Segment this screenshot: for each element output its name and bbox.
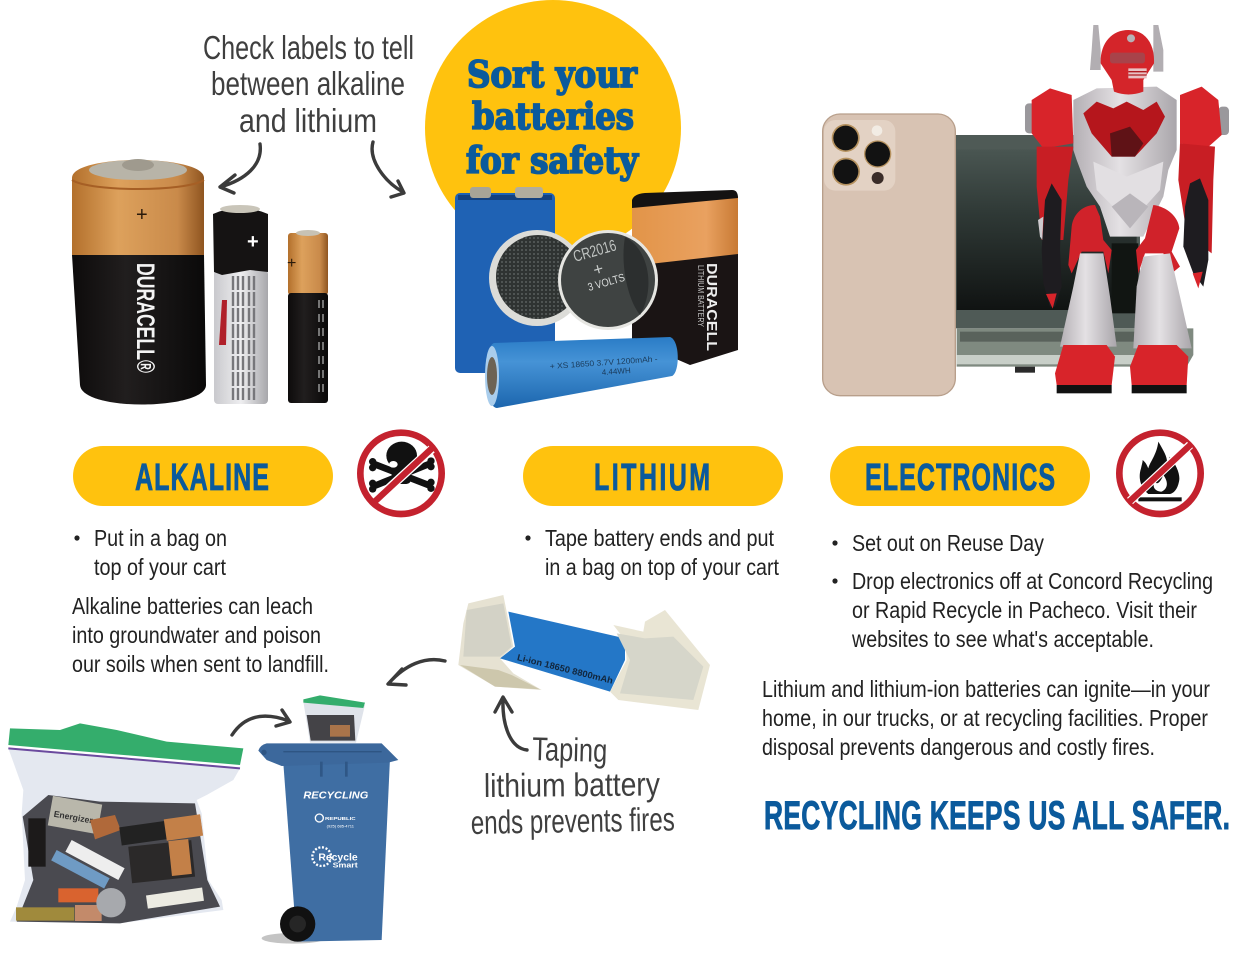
lantern battery: LITHIUM BATTERY — [696, 265, 705, 328]
title: Sort your — [467, 54, 638, 96]
lithium fire warning text — [762, 676, 1210, 760]
recycling bin with bag photo: (925) 685-4711 — [327, 825, 354, 829]
coin cell CR2016 — [558, 230, 658, 330]
taped lithium battery photo — [458, 595, 710, 710]
zip bag of batteries photo — [8, 723, 243, 923]
alkaline batteries photo — [72, 159, 328, 405]
AA battery: + — [247, 231, 259, 253]
electronics instructions — [832, 530, 1213, 652]
18650 cylindrical cell: + XS 18650 3.7V 1200mAh - — [550, 354, 658, 371]
coin cell CR2016: CR2016 — [571, 237, 618, 266]
handwritten note: taping: Taping — [532, 730, 608, 769]
18650 cylindrical cell: 4.44WH — [602, 366, 631, 377]
handwritten note: check labels: and lithium — [239, 102, 377, 139]
label pill: alkaline — [73, 446, 333, 506]
AA battery — [213, 205, 268, 404]
title: batteries — [472, 96, 634, 138]
coin cell CR2016: + — [591, 259, 606, 280]
handwritten note: check labels: Check labels to tell — [203, 29, 414, 66]
alkaline warning text: our soils when sent to landfill. — [72, 651, 329, 677]
alkaline instructions: Put in a bag on — [94, 525, 227, 551]
coin cell CR2016: 3 VOLTS — [587, 272, 626, 294]
9V battery — [455, 187, 555, 373]
smartphone — [823, 114, 955, 396]
zip bag of batteries photo: Energizer — [53, 809, 94, 826]
label pill: electronics — [830, 446, 1090, 506]
lantern battery: DURACELL — [703, 263, 720, 351]
alkaline instructions: top of your cart — [94, 554, 227, 580]
electronics photo — [823, 25, 1229, 396]
closing slogan: RECYCLING KEEPS US ALL SAFER. — [764, 794, 1230, 838]
label pill: alkaline: ALKALINE — [135, 456, 269, 498]
recycling bin with bag photo: Smart — [333, 861, 358, 870]
title — [466, 54, 639, 182]
alkaline warning text: Alkaline batteries can leach — [72, 593, 313, 619]
label pill: lithium: LITHIUM — [594, 456, 710, 498]
no toxic icon — [360, 433, 442, 514]
arrow: to lithium batteries — [372, 142, 404, 197]
arrow: bag to bin — [232, 710, 290, 735]
label pill: lithium — [523, 446, 783, 506]
alkaline instructions — [74, 525, 227, 580]
recycling bin with bag photo: Recycle — [318, 852, 358, 863]
arrow: taped battery to bag — [388, 660, 445, 685]
handwritten note: check labels: between alkaline — [211, 65, 405, 102]
taped lithium battery photo: Li-ion 18650 8800mAh — [516, 652, 614, 686]
D cell battery: DURACELL® — [131, 263, 159, 373]
lithium fire warning text: disposal prevents dangerous and costly fires. — [762, 734, 1155, 760]
recycling bin with bag photo — [258, 695, 398, 944]
electronics instructions: websites to see what's acceptable. — [851, 626, 1154, 652]
handwritten note: taping: ends prevents fires — [470, 800, 675, 841]
lithium instructions — [525, 525, 780, 580]
lithium batteries photo — [455, 187, 738, 408]
laptop — [953, 135, 1193, 373]
AAA battery: + — [287, 255, 296, 272]
lithium instructions: in a bag on top of your cart — [545, 554, 780, 580]
handwritten note: taping: lithium battery — [484, 765, 660, 804]
handwritten note: taping — [470, 730, 675, 841]
lithium instructions: Tape battery ends and put — [545, 525, 775, 551]
arrow: from note to taped battery — [495, 697, 527, 750]
18650 cylindrical cell — [485, 337, 678, 408]
recycling bin with bag photo: RECYCLING — [303, 791, 368, 802]
coin cell mesh side — [489, 230, 585, 326]
D cell battery: + — [136, 204, 148, 226]
alkaline warning text — [72, 593, 329, 677]
yellow title circle — [425, 0, 681, 256]
AAA battery — [287, 230, 328, 403]
lantern battery — [632, 190, 738, 365]
label pill: electronics: ELECTRONICS — [865, 456, 1055, 498]
title: for safety — [466, 140, 639, 182]
toy robot — [1025, 25, 1229, 393]
recycling bin with bag photo: REPUBLIC — [325, 816, 356, 822]
small bag on bin — [303, 695, 365, 743]
no fire icon — [1119, 433, 1201, 514]
electronics instructions: or Rapid Recycle in Pacheco. Visit their — [852, 597, 1197, 623]
electronics instructions: Set out on Reuse Day — [852, 530, 1044, 556]
handwritten note: check labels — [203, 29, 414, 139]
alkaline warning text: into groundwater and poison — [72, 622, 321, 648]
D cell battery — [72, 159, 206, 405]
arrow: to alkaline batteries — [220, 144, 260, 193]
